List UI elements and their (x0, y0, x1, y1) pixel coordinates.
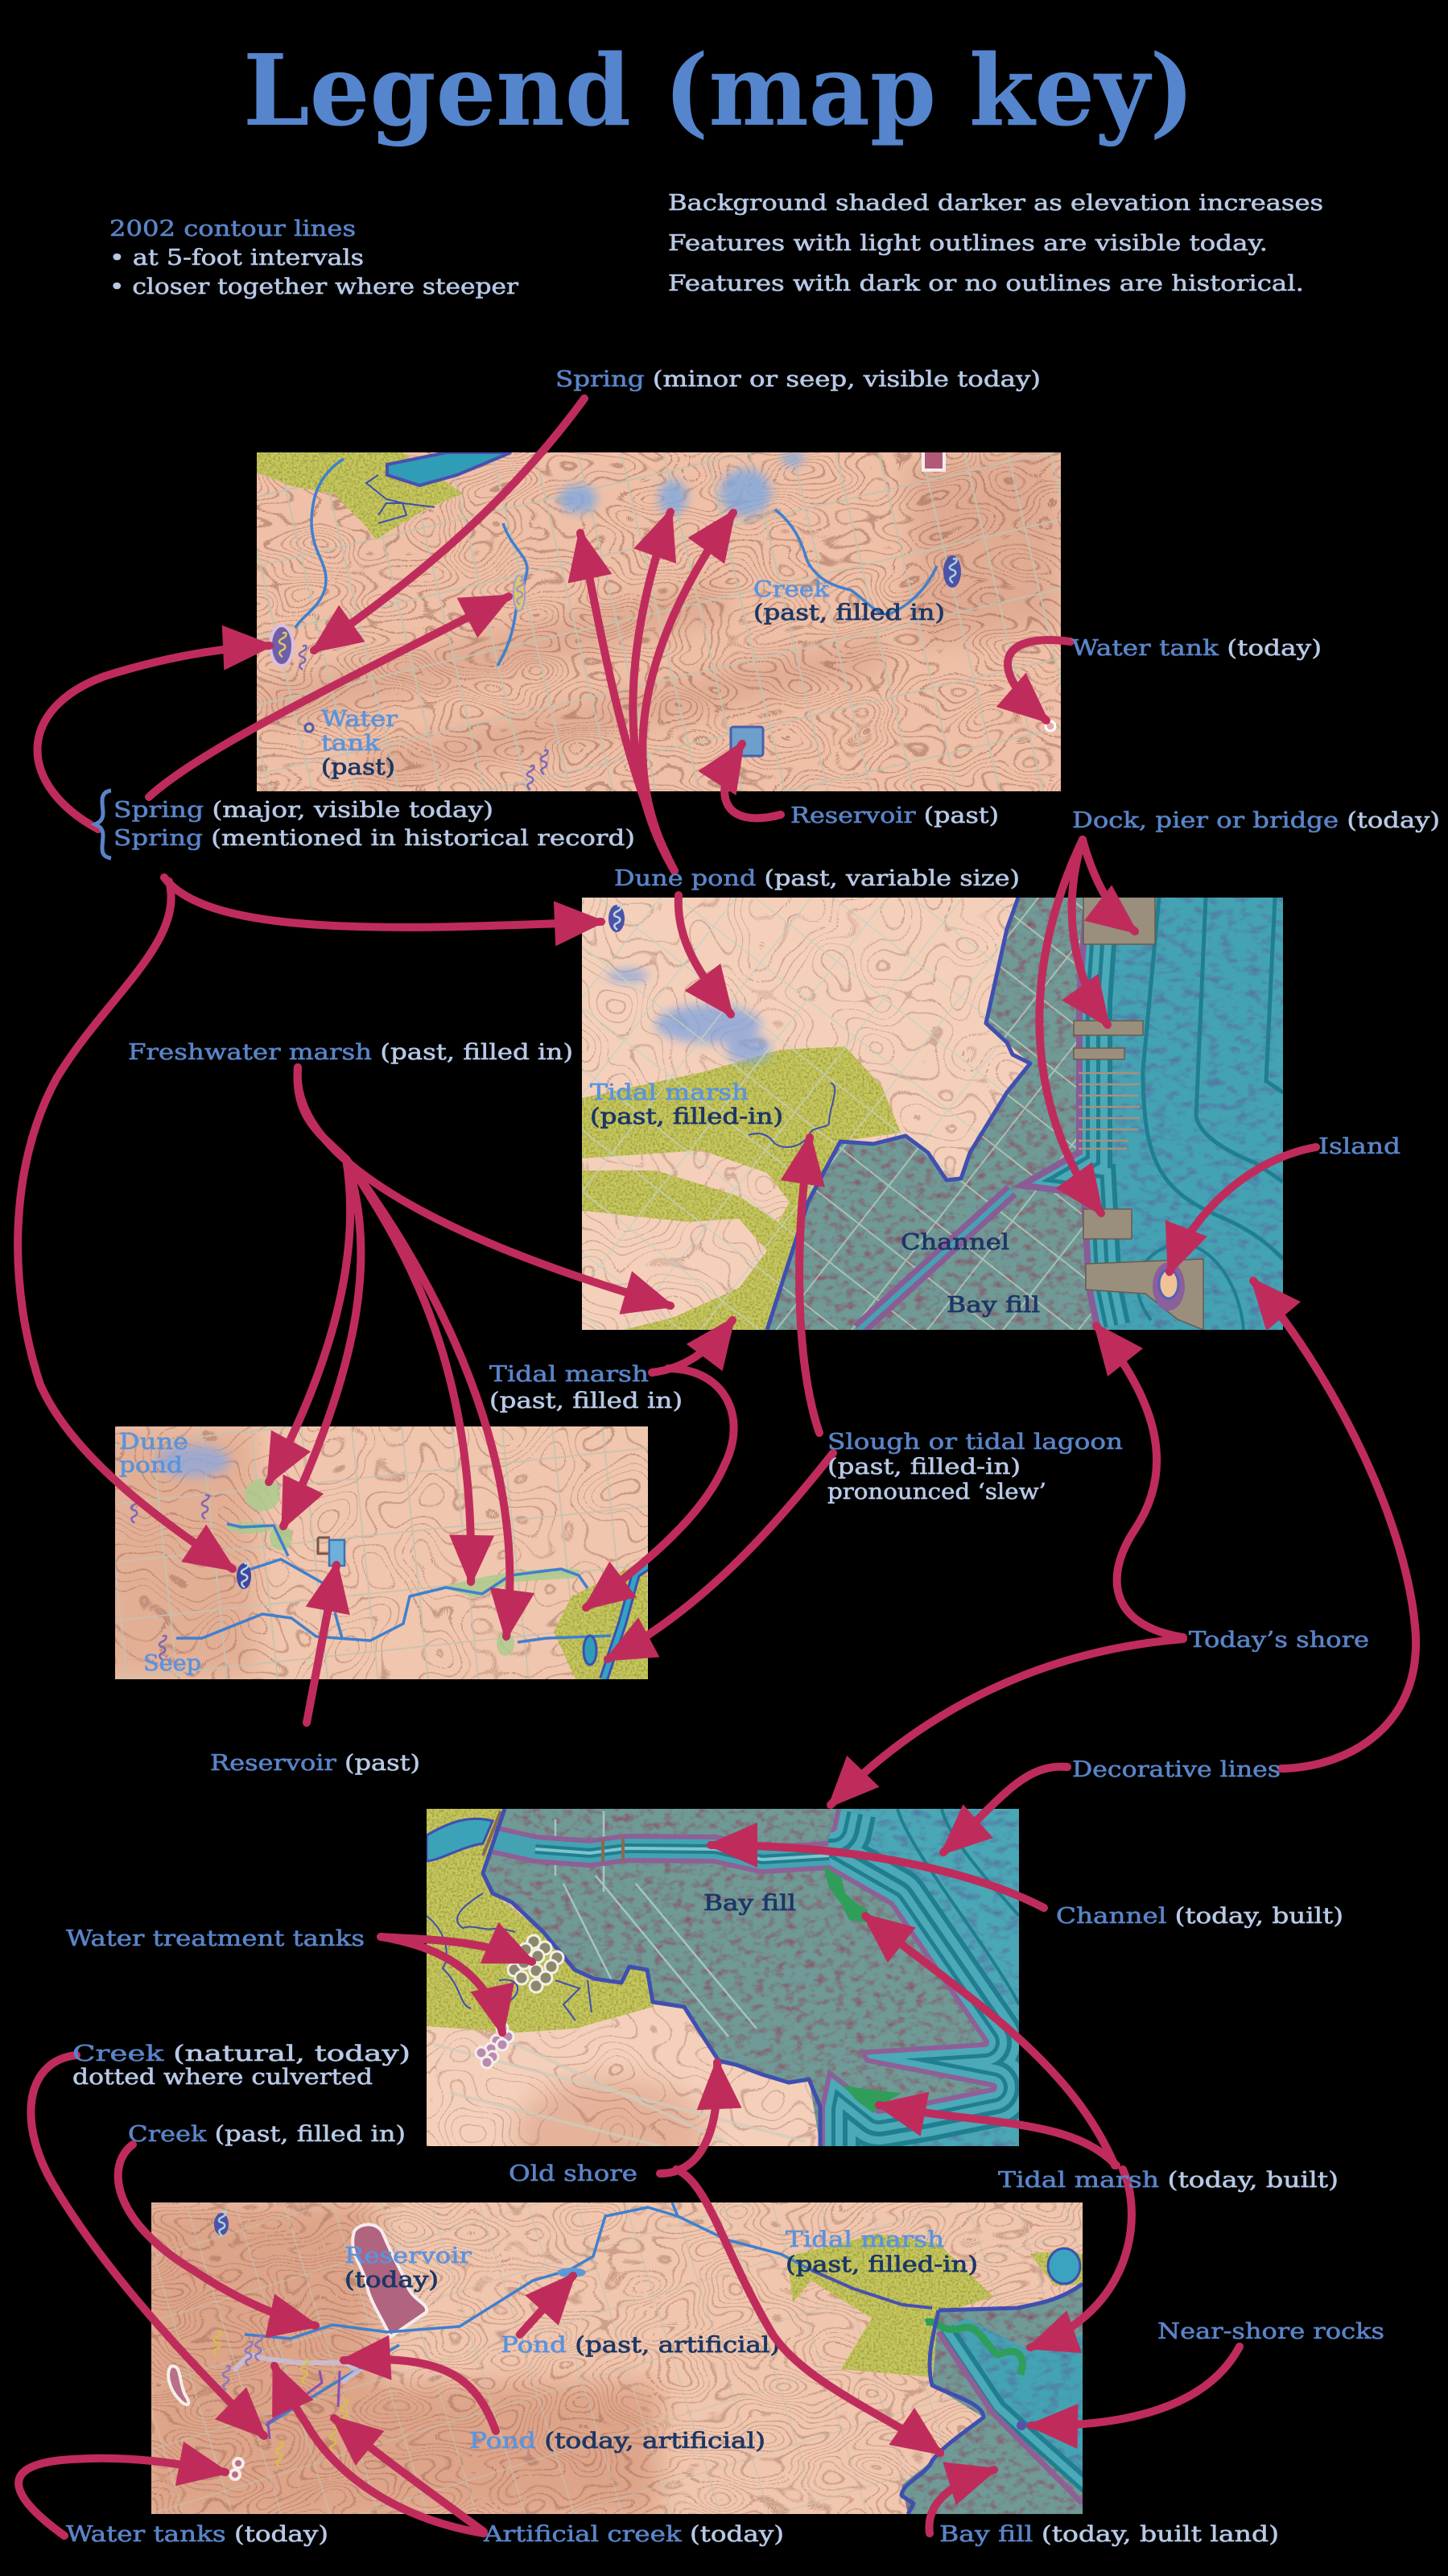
arrow: spring to panel two (164, 877, 601, 927)
arrow: freshwater marsh four (346, 1159, 509, 1637)
map label seep: Seep (143, 1651, 201, 1676)
arrow: artificial creek two (334, 2418, 484, 2532)
map label bay fill: Bay fill (947, 1293, 1040, 1318)
dune ponds (559, 452, 804, 517)
arrow: old shore down (676, 2169, 940, 2453)
brace (95, 791, 111, 858)
map label pond today: Pond (today, artificial) (469, 2429, 765, 2454)
springs (131, 1495, 251, 1660)
water treatment tanks (508, 1935, 563, 1992)
springs (270, 555, 961, 790)
arrow: tidal marsh to panel two (652, 1320, 732, 1373)
arrow: freshwater marsh two (283, 1067, 361, 1526)
label: bay fill today: Bay fill (today, built land) (939, 2522, 1279, 2547)
arrow: dune pond two (633, 512, 674, 871)
map label dune pond: pond (119, 1453, 183, 1478)
label: water treatment tanks: Water treatment tanks (66, 1926, 365, 1951)
water tank today (1046, 721, 1055, 731)
historic marsh (787, 2234, 993, 2377)
bay fill (901, 2284, 1083, 2514)
label: slough: (past, filled-in) (827, 1455, 1021, 1480)
text block: shading and outline notes: Background shaded darker as elevation increases (668, 191, 1323, 216)
panel: south creek map (137, 2202, 1083, 2524)
arrow: island (1170, 1147, 1316, 1272)
label: channel today: Channel (today, built) (1056, 1904, 1343, 1929)
label: spring mentioned: Spring (mentioned in historical record) (113, 826, 635, 851)
arrow: water tanks today (19, 2458, 225, 2536)
arrow: pond today (344, 2359, 496, 2431)
arrow: decorative lines to panel two (1253, 1281, 1416, 1769)
arrow: reservoir panel three (307, 1565, 336, 1723)
reservoir today (353, 2224, 427, 2337)
arrow: pond past (520, 2276, 573, 2334)
label: slough (827, 1430, 1123, 1505)
map label bay fill: Bay fill (703, 1891, 796, 1916)
arrow: tidal marsh today panel five (1030, 2169, 1132, 2347)
springs (214, 2211, 348, 2467)
darker western hills (137, 2202, 660, 2524)
arrow: dune pond panel two (679, 895, 731, 1014)
arrow: reservoir past (724, 744, 781, 818)
bay water (939, 2318, 1083, 2496)
map label reservoir today: (today) (344, 2268, 439, 2293)
title: Legend (map key) (243, 32, 1194, 148)
old shoreline (901, 2284, 1083, 2514)
map label tidal marsh: (past, filled-in) (590, 1104, 783, 1129)
label: reservoir panel three: Reservoir (past) (210, 1751, 420, 1776)
arrow: spring loop to large spring (37, 646, 270, 829)
island (1153, 1262, 1185, 1311)
tidal marsh (554, 1559, 648, 1679)
arrow: treatment tanks one (381, 1937, 532, 1962)
arrow: spring major to yellow spring (149, 597, 509, 797)
arrow: creek natural (31, 2055, 264, 2436)
label: dock: Dock, pier or bridge (today) (1072, 808, 1440, 833)
arrow: near-shore rocks (1031, 2347, 1240, 2425)
text block: shading and outline notes: Features with light outlines are visible today. (668, 231, 1268, 256)
reservoir past (318, 1538, 344, 1566)
arrow: slough to panel two (799, 1137, 819, 1433)
arrow: treatment tanks two (381, 1937, 502, 2033)
map label channel: Channel (901, 1230, 1009, 1255)
marsh creek network (366, 475, 435, 523)
panel: creek valley map (97, 1426, 648, 1679)
arrow: freshwater marsh one (269, 1067, 350, 1482)
street lines (555, 1811, 757, 2037)
green marsh patches (926, 2322, 1022, 2375)
map label tidal marsh past: (past, filled-in) (786, 2252, 978, 2277)
label: reservoir past: Reservoir (past) (790, 803, 999, 828)
marsh in upper left (257, 452, 463, 539)
dune pond (156, 1445, 230, 1477)
historic marsh (582, 1046, 901, 1330)
label: water tank today: Water tank (today) (1071, 636, 1322, 661)
panel: upper hills map (257, 448, 1061, 791)
marsh creeks (427, 1893, 592, 2021)
pond past (557, 2268, 586, 2277)
historic marsh (427, 1809, 653, 2033)
creeks (176, 1524, 611, 1642)
label: creek natural (72, 2041, 410, 2090)
map label water tank past: tank (321, 731, 381, 756)
label: spring major: Spring (major, visible today) (113, 798, 493, 823)
arrow: dune pond three (642, 513, 733, 871)
map label pond past: Pond (past, artificial) (501, 2333, 780, 2358)
reservoir top right (923, 448, 944, 470)
arrow: dock one (1083, 840, 1135, 931)
arrow: dock three (1039, 840, 1101, 1213)
bay water (493, 1809, 1019, 2146)
creeks (245, 2202, 932, 2425)
map label tidal marsh past (786, 2227, 978, 2277)
arrow: spring to panel three (18, 881, 233, 1569)
text block: contour lines note: • closer together where steeper (109, 275, 518, 299)
arrow: today's shore to panel two (1096, 1326, 1183, 1637)
channel (859, 1191, 1012, 1330)
arrow: freshwater marsh to panel two (298, 1067, 670, 1306)
label: tidal marsh today: Tidal marsh (today, built) (998, 2168, 1339, 2193)
map label tidal marsh (590, 1080, 783, 1129)
tidal marsh today green patches (823, 1866, 901, 2113)
label: tidal marsh past: (past, filled in) (489, 1389, 683, 1414)
arrow: old shore up (660, 2062, 717, 2174)
label: tidal marsh past: Tidal marsh (489, 1362, 649, 1387)
text block: shading and outline notes: Features with dark or no outlines are historical. (668, 271, 1304, 296)
arrow: dune pond one (580, 533, 674, 871)
label: decorative lines: Decorative lines (1072, 1757, 1281, 1782)
arrow: freshwater marsh three (346, 1159, 471, 1582)
lagoon (584, 1636, 596, 1665)
label: slough: pronounced ‘slew’ (827, 1480, 1046, 1505)
marsh creeks (749, 1083, 835, 1147)
text block: contour lines note (109, 217, 518, 299)
lagoon (1048, 2248, 1080, 2284)
arrow: decorative lines to panel four (943, 1767, 1067, 1852)
label: water tanks today: Water tanks (today) (66, 2522, 328, 2547)
arrow: slough to panel three (608, 1453, 833, 1659)
channel (493, 1839, 829, 1860)
label: artificial creek: Artificial creek (today) (483, 2522, 784, 2547)
map label creek: Creek (753, 577, 830, 602)
marsh upper right (1030, 2250, 1083, 2286)
bay water (1006, 898, 1283, 1330)
lagoon in upper left (387, 452, 511, 485)
freshwater marsh (227, 1479, 580, 1656)
label: tidal marsh past (489, 1362, 683, 1414)
arrow: bay fill today (929, 2470, 994, 2533)
label: old shore: Old shore (509, 2161, 637, 2186)
near-shore rock (1017, 2421, 1026, 2430)
label: creek natural: Creek (natural, today) (72, 2041, 410, 2066)
map label water tank past: (past) (321, 755, 395, 780)
bay fill (483, 1809, 992, 2146)
hill shading (515, 2077, 708, 2190)
map label water tank past: Water (321, 707, 398, 732)
map label tidal marsh: Tidal marsh (590, 1080, 749, 1105)
arrow: today's shore to panel four (831, 1639, 1183, 1805)
tidal channel (604, 1566, 648, 1679)
bridges (483, 1811, 623, 1861)
arrow: tidal marsh to panel three (586, 1368, 734, 1608)
map label water tank past (321, 707, 398, 780)
arrow: tidal marsh today upper (865, 1916, 1115, 2165)
old shoreline (483, 1809, 820, 2146)
label: creek natural: dotted where culverted (72, 2065, 373, 2090)
label: island: Island (1318, 1134, 1401, 1159)
water tank past (305, 724, 313, 732)
map label dune pond (119, 1430, 188, 1478)
label: dune pond: Dune pond (past, variable size) (614, 866, 1020, 891)
elevation shading bands (257, 499, 1061, 773)
label: creek past: Creek (past, filled in) (128, 2122, 406, 2147)
dune pond (607, 969, 771, 1063)
text block: contour lines note: 2002 contour lines (109, 217, 356, 242)
map label creek (753, 577, 945, 625)
panel: bay fill map (427, 1809, 1019, 2190)
bay purple edge (939, 2332, 1083, 2504)
creeks (295, 459, 937, 666)
arrow: creek past (118, 2145, 316, 2326)
arrow: channel today (711, 1845, 1044, 1908)
thin pier lines (1079, 1073, 1140, 1149)
arrow: spring minor (314, 398, 584, 650)
text block: shading and outline notes (668, 191, 1323, 296)
spring (608, 905, 625, 932)
bay fill (767, 898, 1095, 1330)
text block: contour lines note: • at 5-foot intervals (109, 246, 364, 270)
map label creek: (past, filled in) (753, 601, 945, 625)
darker western slope (97, 1426, 258, 1679)
creek lagoon (427, 1818, 493, 1861)
label: slough: Slough or tidal lagoon (827, 1430, 1123, 1455)
treatment tanks lower cluster (476, 2023, 514, 2068)
label: spring minor: Spring (minor or seep, visible today) (555, 367, 1041, 392)
old shoreline (767, 898, 1030, 1330)
map label tidal marsh past: Tidal marsh (786, 2227, 944, 2252)
panel: downtown shoreline map (582, 890, 1283, 1330)
reservoir past (731, 727, 763, 756)
artificial pond and creek (233, 2355, 358, 2439)
arrow: artificial creek one (274, 2366, 484, 2533)
water tanks today (168, 2366, 243, 2479)
label: near-shore rocks: Near-shore rocks (1157, 2319, 1384, 2344)
map label reservoir today: Reservoir (344, 2244, 472, 2268)
arrow: water tank today (1008, 640, 1071, 720)
map label reservoir today (344, 2244, 472, 2293)
piers (1074, 890, 1203, 1330)
arrow: tidal marsh today lower (879, 2105, 1116, 2165)
map label dune pond: Dune (119, 1430, 188, 1455)
label: freshwater marsh: Freshwater marsh (past, filled in) (128, 1040, 573, 1065)
arrow: dock two (1072, 840, 1108, 1025)
label: today's shore: Today’s shore (1189, 1628, 1369, 1653)
